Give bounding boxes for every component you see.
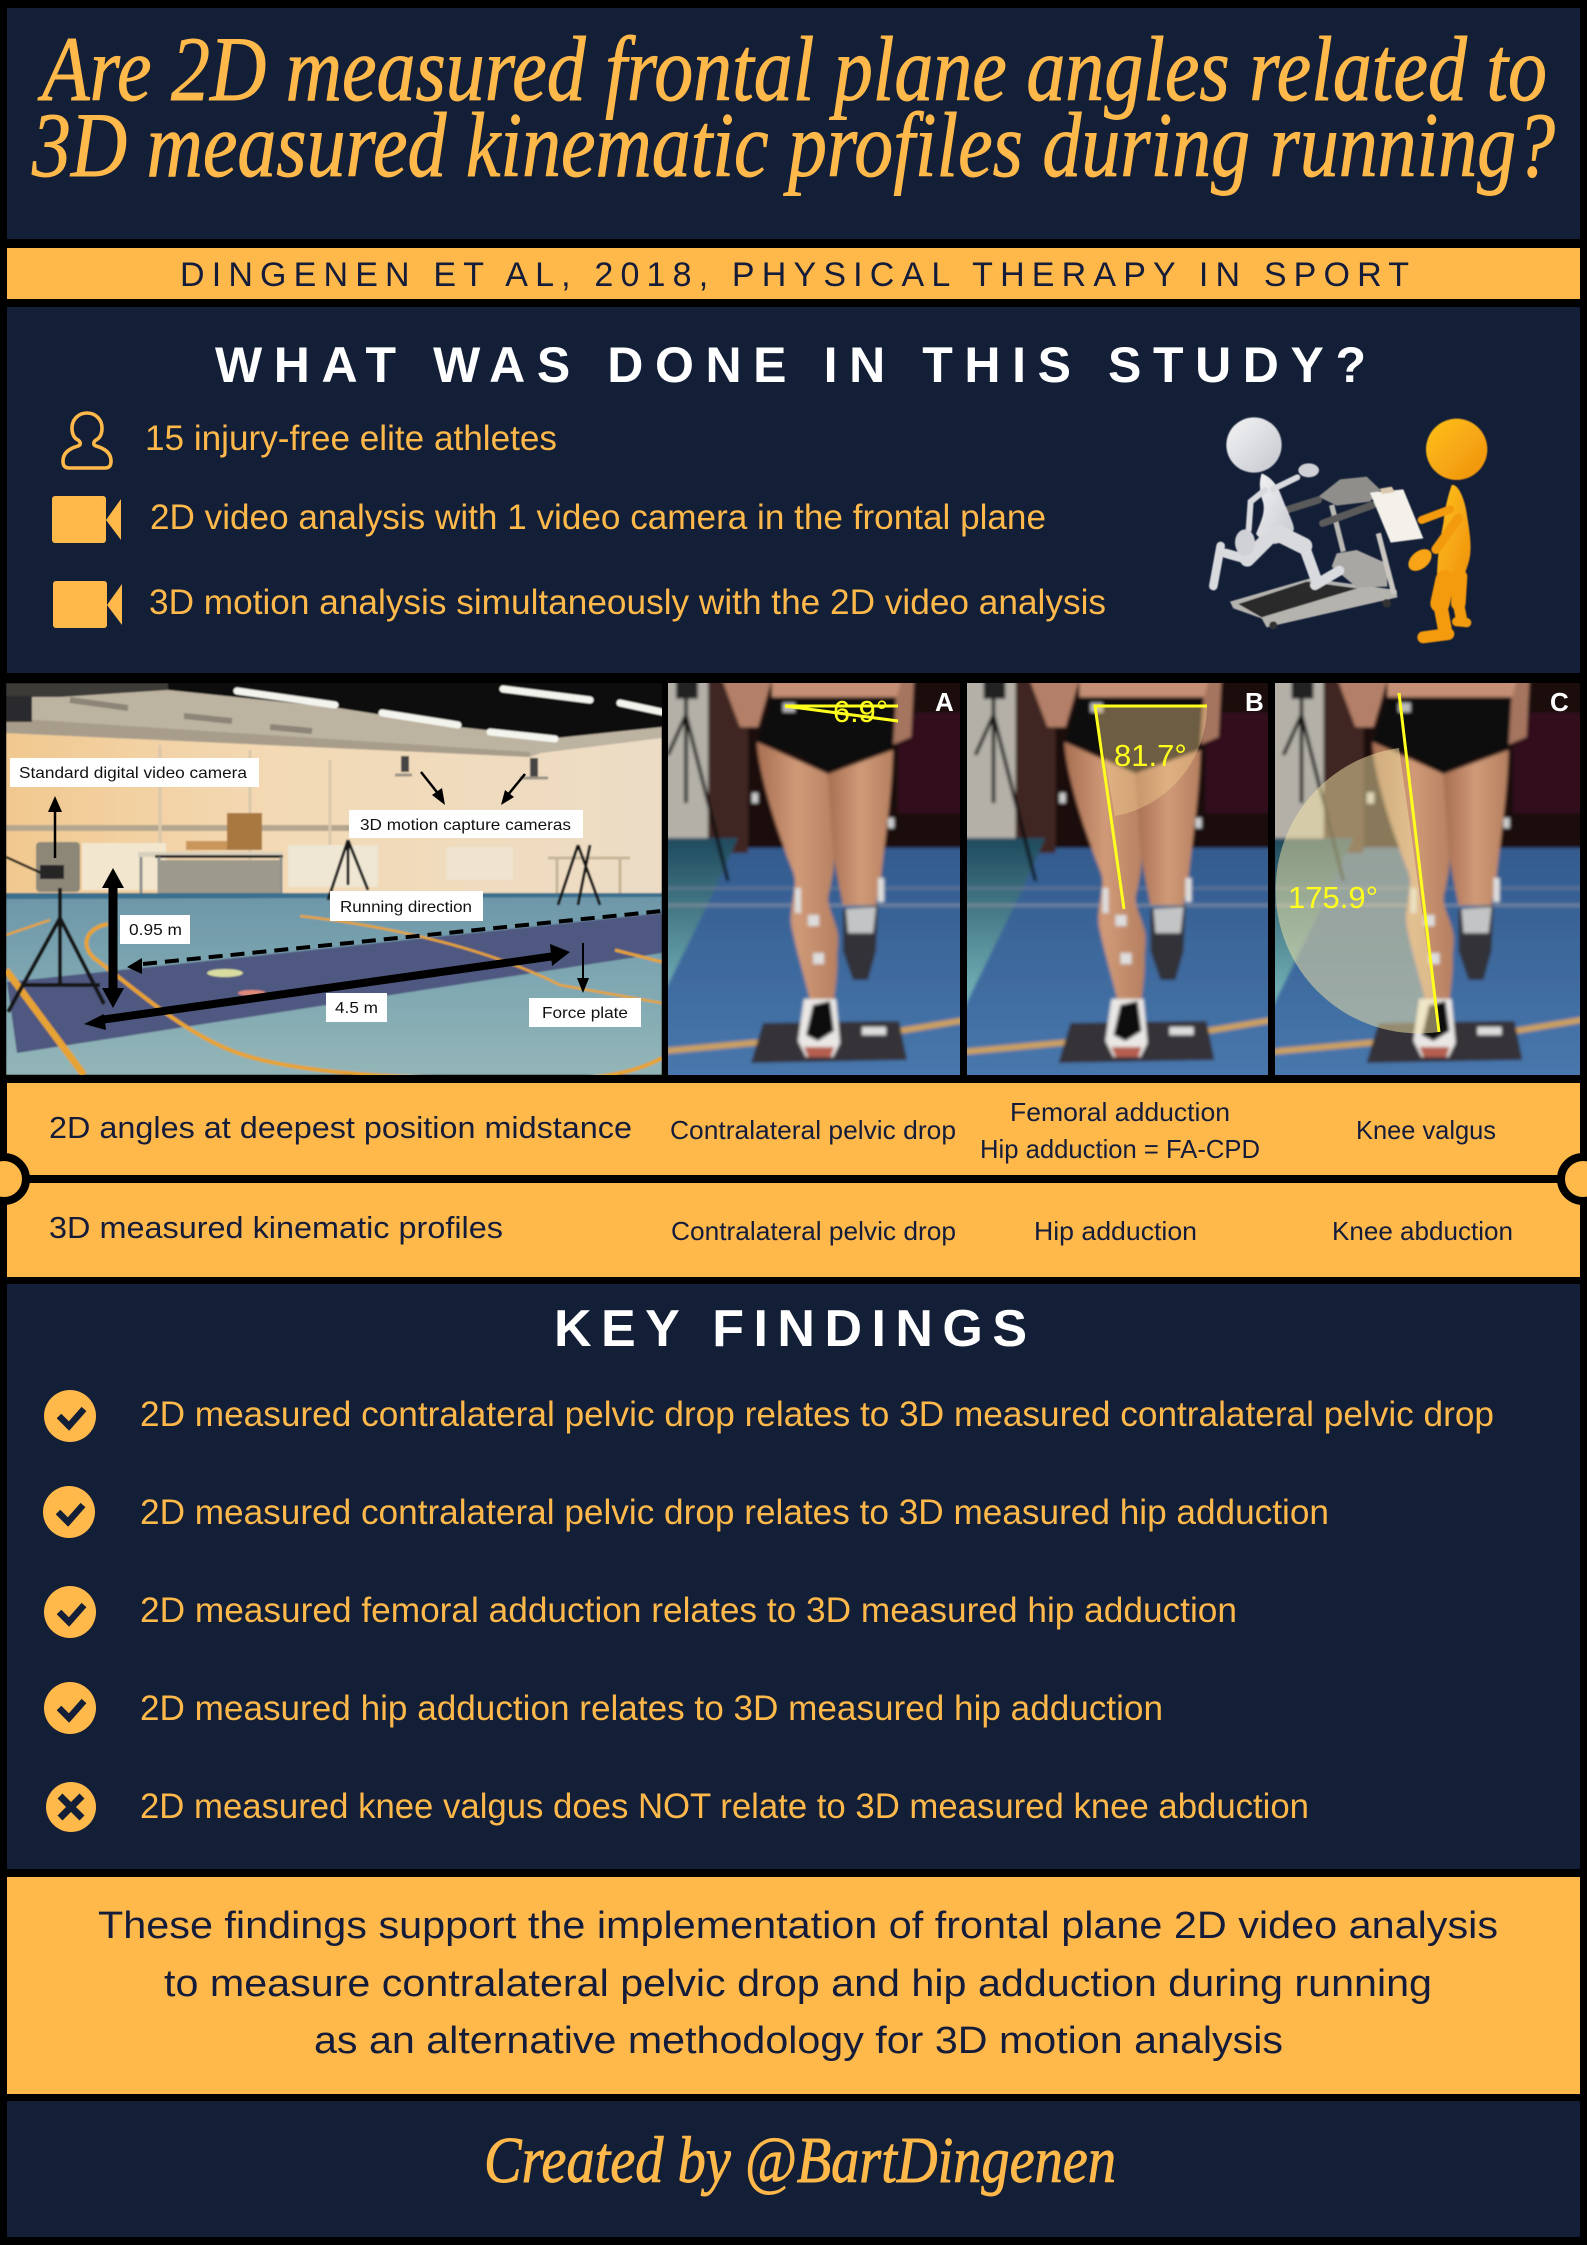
row: 2D angles: Knee valgus xyxy=(1356,1115,1496,1145)
letter B: B xyxy=(1245,687,1264,717)
label: running direction xyxy=(330,891,483,921)
panel: conclusion: to measure contralateral pelvic drop and hip adduction during running xyxy=(164,1963,1432,2005)
label: 4.5 m: 4.5 m xyxy=(335,1000,378,1017)
label: 3D motion capture cameras xyxy=(349,810,583,838)
finding 1 xyxy=(44,1390,1494,1442)
panel: 2D angles and 3D profiles table xyxy=(0,1083,1587,1277)
row: 2D angles: Femoral adduction xyxy=(1010,1097,1230,1127)
label: 4.5 m xyxy=(326,993,387,1022)
row: 3D profiles: Hip adduction xyxy=(1034,1216,1197,1246)
panel: conclusion xyxy=(7,1877,1580,2094)
finding 1: 2D measured contralateral pelvic drop relates to 3D measured contralateral pelvic drop xyxy=(140,1395,1494,1434)
letter C: C xyxy=(1550,687,1569,717)
illustration: runner on treadmill and orange clinician xyxy=(1213,417,1487,637)
photo A: contralateral pelvic drop angle xyxy=(668,683,960,1075)
panel: what was done in this study xyxy=(7,307,1580,673)
text: 2D video: 2D video analysis with 1 video camera in the frontal plane xyxy=(150,498,1046,537)
icon: video camera xyxy=(53,581,122,628)
letter A: A xyxy=(935,687,954,717)
label: running direction: Running direction xyxy=(340,899,472,916)
finding 5: 2D measured knee valgus does NOT relate to 3D measured knee abduction xyxy=(140,1787,1309,1826)
heading: key findings: KEY FINDINGS xyxy=(554,1300,1027,1358)
angle value A: 6.9° xyxy=(833,694,888,729)
panel: footer credit: Created by @BartDingenen xyxy=(484,2124,1116,2197)
label: force plate: Force plate xyxy=(542,1005,628,1022)
finding 2: 2D measured contralateral pelvic drop relates to 3D measured hip adduction xyxy=(140,1493,1329,1532)
panel: key findings xyxy=(7,1284,1580,1869)
citation band: DINGENEN ET AL, 2018, PHYSICAL THERAPY IN SPORT xyxy=(180,256,1409,294)
label: 0.95 m xyxy=(120,915,190,944)
label: 0.95 m: 0.95 m xyxy=(129,922,182,939)
label: force plate xyxy=(529,998,641,1027)
text: athletes: 15 injury-free elite athletes xyxy=(145,419,557,458)
finding 3 xyxy=(44,1586,1237,1638)
photo C: knee valgus angle xyxy=(1270,679,1587,1079)
white runner figure xyxy=(1213,417,1339,586)
row: 3D profiles: 3D measured kinematic profiles xyxy=(49,1210,503,1245)
panel: conclusion: These findings support the implementation of frontal plane 2D video analysis xyxy=(98,1905,1498,1947)
panel: title xyxy=(7,8,1580,239)
finding 4 xyxy=(44,1682,1163,1734)
row: 3D profiles: Knee abduction xyxy=(1332,1216,1513,1246)
angle value C: 175.9° xyxy=(1288,880,1378,915)
photo B: femoral adduction angle xyxy=(967,683,1268,1075)
finding 4: 2D measured hip adduction relates to 3D measured hip adduction xyxy=(140,1689,1163,1728)
row: 2D angles: Hip adduction = FA-CPD xyxy=(980,1134,1260,1164)
citation band xyxy=(7,248,1580,299)
arrows xyxy=(48,772,662,1030)
label: standard digital video camera: Standard digital video camera xyxy=(19,765,247,782)
title heading xyxy=(31,18,1555,196)
panel: footer credit xyxy=(7,2101,1580,2237)
label: 3D motion capture cameras: 3D motion capture cameras xyxy=(360,817,571,834)
finding 3: 2D measured femoral adduction relates to 3D measured hip adduction xyxy=(140,1591,1237,1630)
row: 3D profiles xyxy=(49,1210,1513,1246)
text: 3D motion: 3D motion analysis simultaneously with the 2D video analysis xyxy=(149,583,1106,622)
icon: video camera xyxy=(52,496,121,543)
label: standard digital video camera xyxy=(10,758,259,787)
row: 2D angles xyxy=(49,1097,1496,1164)
row: 2D angles: Contralateral pelvic drop xyxy=(670,1115,956,1145)
row: 2D angles: 2D angles at deepest position midstance xyxy=(49,1110,632,1145)
row: 3D profiles: Contralateral pelvic drop xyxy=(671,1216,956,1246)
angle value B: 81.7° xyxy=(1114,738,1187,773)
finding 2 xyxy=(43,1486,1329,1538)
icon: person xyxy=(63,413,111,468)
photo: lab set-up with labelled distances xyxy=(6,683,662,1080)
heading: what was done: WHAT WAS DONE IN THIS STUDY? xyxy=(215,337,1366,393)
orange clinician figure with clipboard xyxy=(1404,419,1487,637)
panel: conclusion: as an alternative methodology for 3D motion analysis xyxy=(314,2020,1283,2062)
